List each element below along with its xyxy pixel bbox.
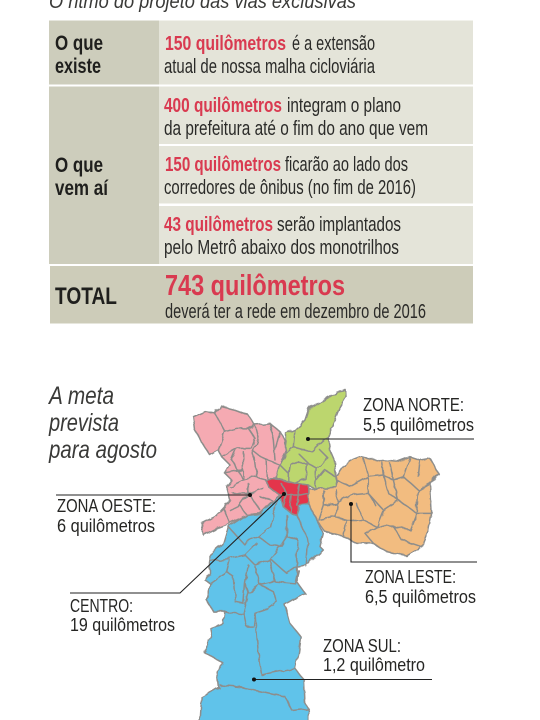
callout: zona oeste: ZONA OESTE: <box>57 495 156 516</box>
callout: zona leste <box>349 502 477 607</box>
row: O que existe: existe <box>55 55 101 78</box>
callout: zona sul: ZONA SUL: <box>323 635 401 656</box>
callout: zona norte: ZONA NORTE: <box>363 394 464 415</box>
callout: centro: CENTRO: <box>70 595 133 616</box>
row: O que vem aí: O que <box>55 154 103 177</box>
item: 150 quilômetros: ficarão ao lado dos <box>285 154 408 176</box>
callout: zona oeste <box>56 493 252 536</box>
callout: zona oeste: 6 quilômetros <box>57 515 155 536</box>
item: 400 quilômetros <box>159 86 473 144</box>
item: 400 quilômetros: integram o plano <box>287 95 401 117</box>
row: total <box>50 266 473 324</box>
item: 400 quilômetros: 400 quilômetros <box>164 95 282 117</box>
zone: oeste <box>193 407 286 535</box>
callout: zona sul: 1,2 quilômetro <box>323 654 425 675</box>
heading: A meta prevista para agosto <box>47 382 157 464</box>
zone: sul <box>200 495 323 720</box>
row: total: deverá ter a rede em dezembro de 2016 <box>165 301 426 323</box>
row: O que existe: 150 quilômetros <box>165 33 286 55</box>
row: O que existe: O que <box>55 32 103 55</box>
zone: centro <box>265 479 308 517</box>
item: 43 quilômetros: 43 quilômetros <box>164 214 273 236</box>
row: O que existe: é a extensão <box>292 33 375 55</box>
item: 400 quilômetros: da prefeitura até o fim do ano que vem <box>164 118 428 140</box>
callout: zona leste: 6,5 quilômetros <box>365 586 476 607</box>
zone: leste <box>308 457 438 556</box>
callout: centro <box>70 492 286 635</box>
callout: zona sul <box>252 635 432 682</box>
zone: norte <box>277 390 346 488</box>
item: 150 quilômetros <box>159 146 473 204</box>
callout: centro: 19 quilômetros <box>70 614 175 635</box>
heading: A meta prevista para agosto: prevista <box>48 409 119 437</box>
item: 43 quilômetros: serão implantados <box>277 214 401 236</box>
row: total: TOTAL <box>55 283 117 310</box>
item: 150 quilômetros: 150 quilômetros <box>165 154 281 176</box>
row: O que existe <box>49 20 473 84</box>
callout: zona norte: 5,5 quilômetros <box>363 414 474 435</box>
row: O que existe: atual de nossa malha cicloviária <box>164 56 376 78</box>
item: 43 quilômetros <box>159 206 473 264</box>
item: 43 quilômetros: pelo Metrô abaixo dos monotrilhos <box>164 237 399 259</box>
item: 150 quilômetros: corredores de ônibus (no fim de 2016) <box>164 177 416 199</box>
heading: A meta prevista para agosto: A meta <box>47 382 114 410</box>
row: total: 743 quilômetros <box>165 270 345 302</box>
callout: zona norte <box>306 394 474 441</box>
row: O que vem aí: vem aí <box>55 177 109 200</box>
row: O que vem aí <box>49 86 473 264</box>
callout: zona leste: ZONA LESTE: <box>365 566 456 587</box>
map: São Paulo zones <box>193 390 438 720</box>
panel: table <box>49 20 473 324</box>
heading: A meta prevista para agosto: para agosto <box>48 436 157 464</box>
